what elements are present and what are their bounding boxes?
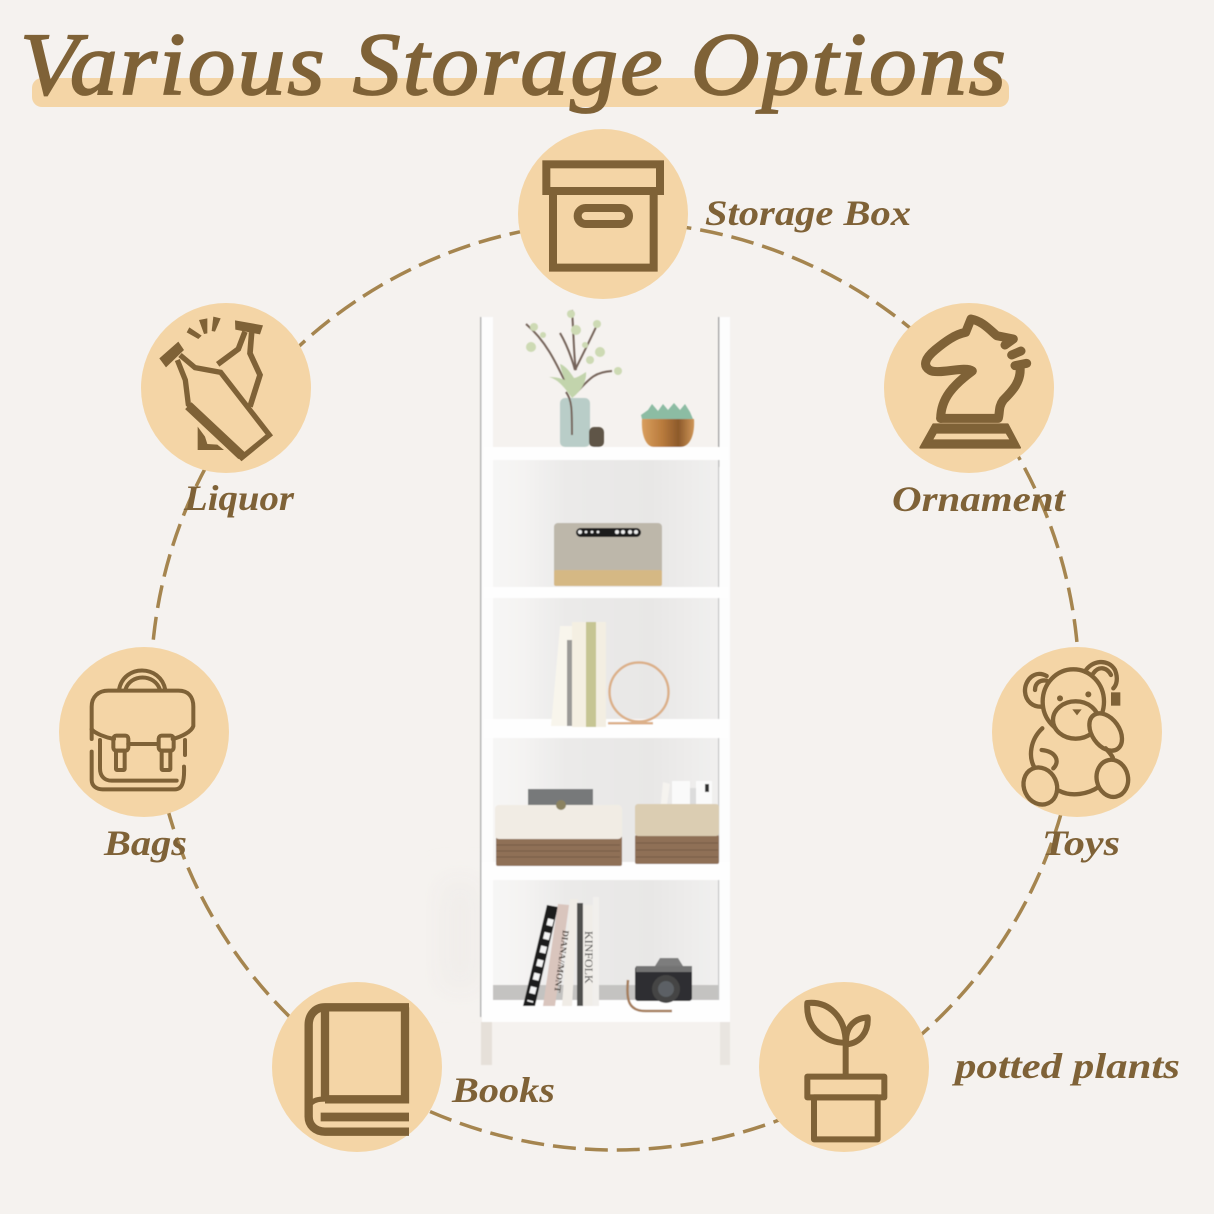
leaning books: KINFOLK: [582, 931, 596, 984]
label: potted plants: potted plants: [951, 1046, 1180, 1086]
icon: chess knight ornament: [884, 303, 1054, 473]
right basket with books: [635, 781, 719, 864]
upright books and ring ornament: [551, 622, 668, 727]
icon: book: [272, 982, 442, 1152]
icon: potted plant: [759, 982, 929, 1152]
camera with strap: [627, 958, 692, 1011]
radio speaker: [554, 523, 662, 586]
shelf back panels: [493, 460, 719, 1005]
icon: liquor bottles: [141, 303, 311, 473]
icon: teddy bear toys: [992, 647, 1162, 817]
shelf boards: [482, 447, 730, 1022]
succulent in gold pot: [641, 403, 694, 447]
label: Books: Books: [451, 1070, 555, 1110]
left basket: [495, 789, 622, 866]
shelf photo: [440, 310, 730, 1065]
vase with branches: [526, 310, 622, 447]
leaning books: [523, 897, 599, 1006]
shelf side rails: [480, 317, 730, 1065]
label: Toys: Toys: [1042, 823, 1120, 863]
label: Bags: Bags: [103, 823, 187, 863]
title: Various Storage Options: [20, 16, 1008, 114]
icon: satchel bag: [59, 647, 229, 817]
wall shadow: [440, 880, 480, 990]
icon: storage box: [518, 129, 688, 299]
dashed ring connecting icons: [151, 222, 1079, 1150]
label: Storage Box: Storage Box: [705, 193, 911, 233]
label: Ornament: Ornament: [892, 479, 1066, 519]
leaning books: DIANA//MONT: [552, 930, 571, 993]
title highlight bar: [32, 78, 1009, 107]
label: Liquor: Liquor: [183, 478, 295, 518]
